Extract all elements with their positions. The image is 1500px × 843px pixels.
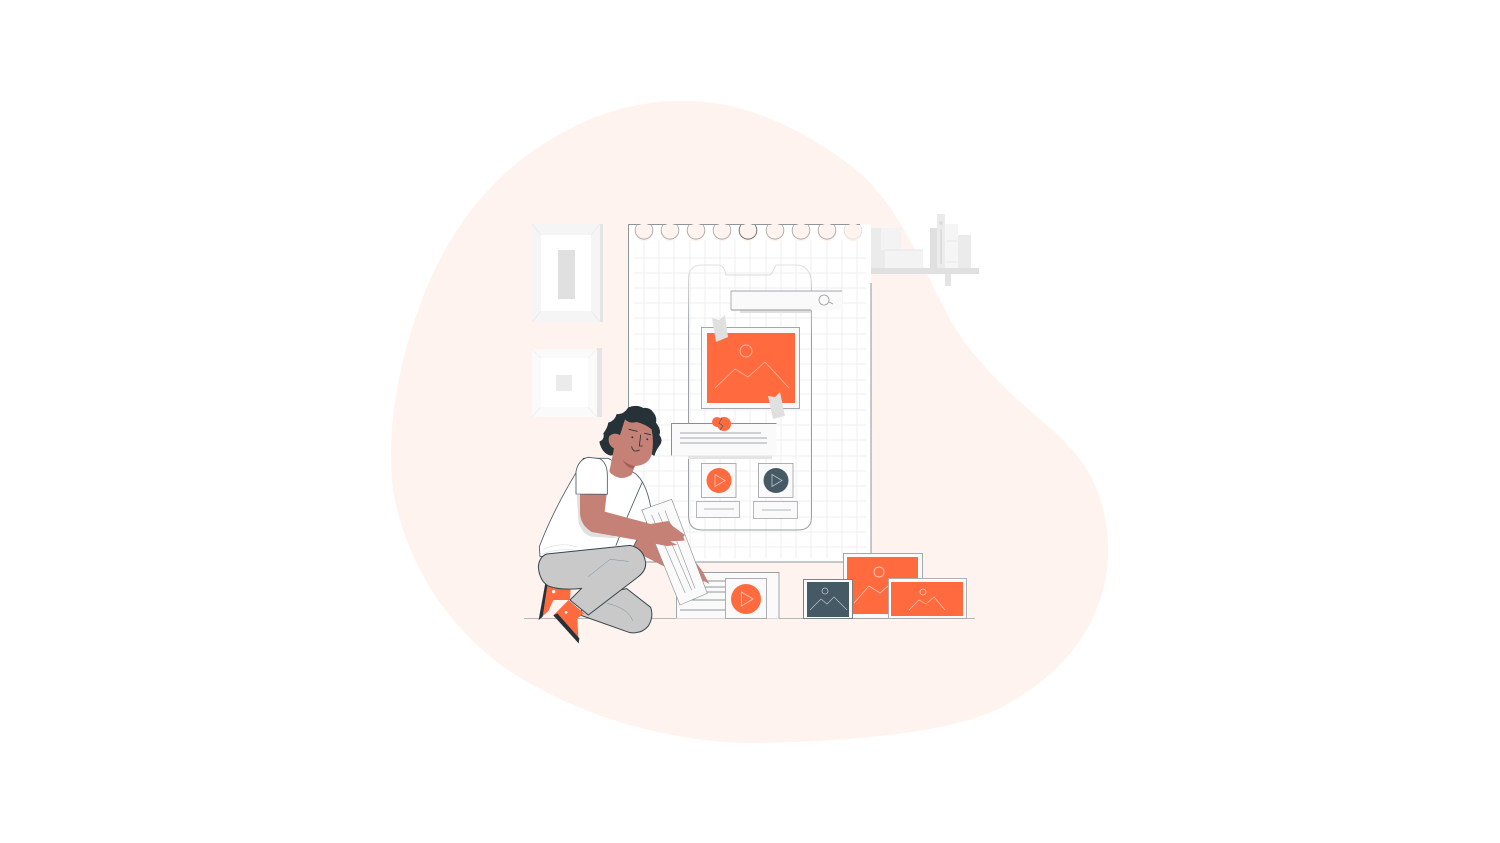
hair back: [599, 406, 662, 456]
orange picture large: [844, 554, 922, 618]
caption cards: [696, 502, 798, 518]
orange picture wide: [888, 578, 966, 618]
notebook border: [628, 224, 871, 562]
shirt hem folds: [542, 545, 577, 554]
torso shirt: [539, 458, 651, 557]
shelf with books: [871, 214, 979, 286]
shirt seam: [616, 483, 642, 545]
floor line: [524, 618, 975, 620]
video card large: [726, 578, 766, 618]
wall frame: square: [532, 348, 602, 417]
background blob: [391, 101, 1108, 743]
paper stack with video card: [676, 572, 779, 618]
far arm: [632, 535, 709, 584]
binding holes: [634, 220, 864, 241]
lower leg: [580, 589, 652, 633]
person: [538, 406, 709, 643]
neck and face: [609, 419, 653, 478]
tape bottom: [768, 392, 785, 419]
held paper: [642, 499, 707, 605]
shirt shadow: [577, 495, 617, 538]
front shoe: [553, 600, 584, 643]
video card orange: [702, 464, 736, 498]
thigh: [538, 545, 646, 615]
near arm and sleeve: [576, 457, 685, 546]
search bar: [731, 291, 842, 313]
text card: [672, 424, 776, 459]
dark picture: [804, 580, 852, 618]
phone outline: [688, 265, 812, 530]
pants folds: [588, 559, 633, 621]
notebook page: [628, 220, 871, 562]
hole outlines: [635, 225, 862, 239]
notebook grid: [634, 240, 866, 558]
wall frame: tall: [532, 224, 603, 322]
chin shadow: [623, 460, 635, 469]
face details: [629, 429, 651, 451]
broken heart pin: [712, 417, 731, 431]
video card dark: [758, 464, 793, 498]
main image card: [702, 328, 800, 408]
tape top: [712, 315, 728, 342]
back shoe: [539, 583, 571, 620]
